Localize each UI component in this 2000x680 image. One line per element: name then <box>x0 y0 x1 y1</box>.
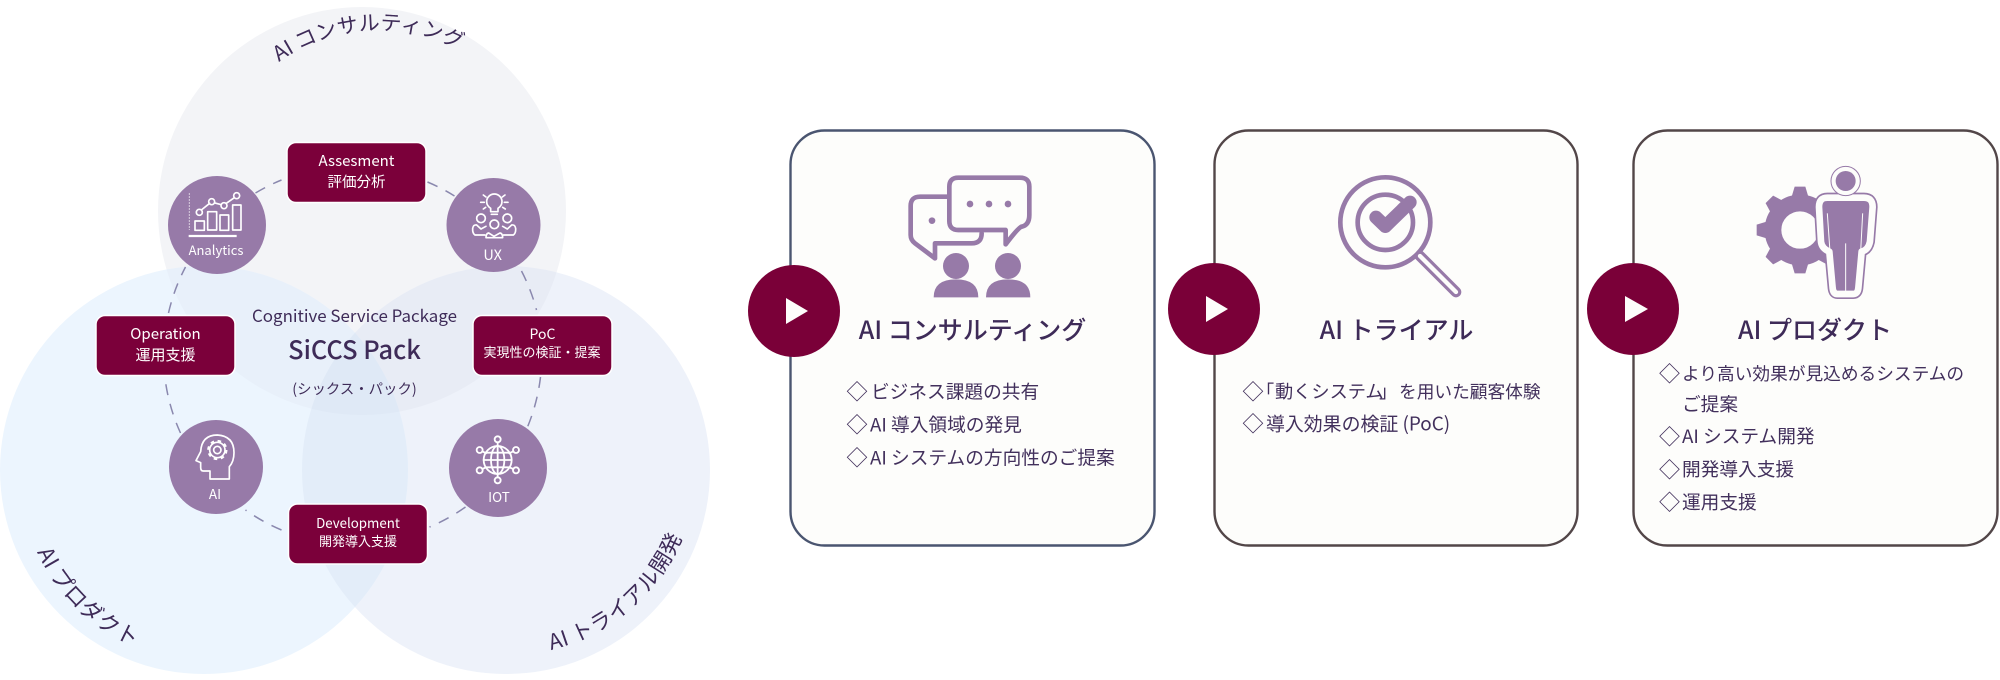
bullet list: ◇ <box>1659 358 1680 388</box>
bullet list: AI システムの方向性のご提案 <box>870 444 1115 470</box>
node: Analytics: Analytics <box>189 240 243 259</box>
box: Assesment: 評価分析 <box>328 171 386 192</box>
node: IOT: IOT <box>488 486 510 506</box>
box: PoC: 実現性の検証・提案 <box>483 342 601 361</box>
bullet list: ◇ <box>1659 486 1680 516</box>
panel: AI product <box>1634 130 1998 546</box>
circle: AI product <box>0 266 408 674</box>
heading: SiCCS Pack: SiCCS Pack <box>288 331 421 367</box>
panel: AI consulting <box>790 130 1154 546</box>
bullet list: 運用支援 <box>1682 488 1757 515</box>
bullet list: より高い効果が見込めるシステムの <box>1682 360 1964 386</box>
heading: AI コンサルティング <box>859 311 1086 347</box>
box: Development: Development <box>316 513 400 532</box>
bullet list <box>1659 358 1964 516</box>
bullet list: 開発導入支援 <box>1682 455 1794 482</box>
heading: AI トライアル <box>1320 311 1473 347</box>
box: PoC: PoC <box>530 324 556 344</box>
bullet list: 動くシステム <box>1275 378 1384 404</box>
heading: AI プロダクト <box>1738 311 1892 347</box>
arrow: step 1 play button <box>748 265 840 357</box>
icon: speech bubbles and two people <box>911 178 1030 297</box>
bullet list: 」 <box>1379 378 1397 404</box>
bullet list: ◇ <box>846 409 868 439</box>
curved label: AI consulting: AI コンサルティング <box>274 14 466 62</box>
box: PoC <box>473 316 612 376</box>
bullet list: AI システム開発 <box>1682 422 1815 449</box>
node: IOT <box>449 419 547 517</box>
node: Analytics <box>168 176 266 274</box>
reading: shikkusu pakku: (シックス・パック) <box>292 378 417 399</box>
box: Development: 開発導入支援 <box>319 531 397 550</box>
bullet list: ◇ <box>846 442 868 472</box>
circle: AI trial development <box>302 266 710 674</box>
node: AI <box>169 420 263 514</box>
icon: bulb and people <box>473 194 516 238</box>
icon: head with gear <box>196 435 234 479</box>
bullet list <box>846 376 1115 472</box>
panel: AI trial <box>1214 130 1578 546</box>
bullet list: ◇ <box>1242 376 1264 406</box>
box: Assesment <box>287 142 426 202</box>
arrow: step 3 play button <box>1587 263 1679 355</box>
bullet list: ◇ <box>1242 408 1264 438</box>
node: UX <box>446 178 540 272</box>
bullet list: ◇ <box>846 376 868 406</box>
arrow: step 2 play button <box>1168 263 1260 355</box>
dashed cycle ring <box>166 180 540 530</box>
node: UX: UX <box>483 244 503 265</box>
box: Operation: Operation <box>130 323 201 344</box>
curved label: AI trial development: AI トライアル開発 <box>551 532 682 650</box>
box: Operation <box>96 316 235 376</box>
box: Assesment: Assesment <box>319 150 395 171</box>
icon: bar chart with trend line <box>189 193 241 236</box>
bullet list: ◇ <box>1659 421 1680 451</box>
box: Operation: 運用支援 <box>135 344 196 365</box>
curved label: AI product: AI プロダクト <box>37 550 134 642</box>
subtitle: Cognitive Service Package: Cognitive Service Package <box>252 302 457 327</box>
bullet list: 導入効果の検証 (PoC) <box>1266 410 1450 436</box>
icon: magnifier with check <box>1340 177 1456 292</box>
bullet list <box>1242 376 1541 438</box>
bullet list: 「 <box>1256 378 1274 404</box>
bullet list: ビジネス課題の共有 <box>871 378 1039 404</box>
icon: network globe <box>477 436 519 483</box>
venn diagram: AI service circles <box>0 7 710 674</box>
bullet list: ご提案 <box>1682 390 1738 417</box>
bullet list: ◇ <box>1659 454 1680 484</box>
bullet list: を用いた顧客体験 <box>1399 378 1541 404</box>
bullet list: AI 導入領域の発見 <box>870 410 1022 438</box>
box: Development <box>288 504 428 564</box>
center title block <box>252 302 457 399</box>
node: AI: AI <box>209 483 221 503</box>
icon: gear and person <box>1757 166 1873 294</box>
circle: AI consulting <box>158 7 566 415</box>
